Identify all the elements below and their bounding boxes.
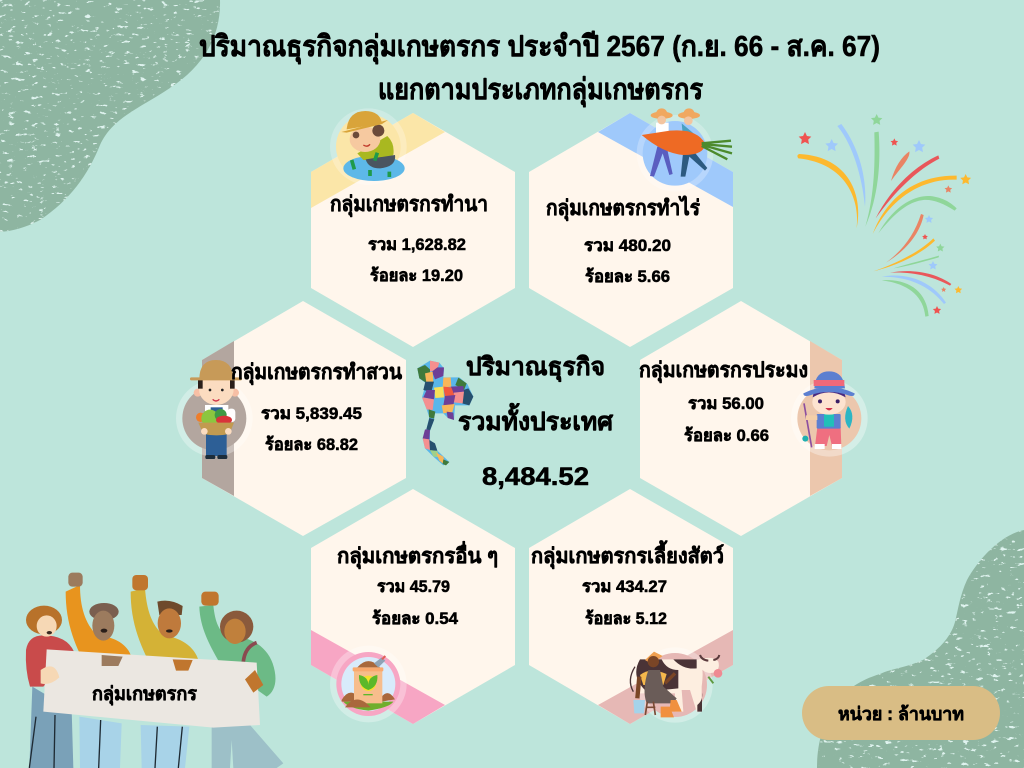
heading: กลุ่มเกษตรกรเลี้ยงสัตว์ [531, 540, 724, 570]
band: peach side [810, 341, 842, 496]
icon: farmer milking cow [630, 647, 722, 723]
unit label [802, 686, 1000, 740]
band: rose corner [598, 630, 733, 724]
panel: field crop farmers [529, 108, 733, 347]
total: รวม 1,628.82 [368, 235, 466, 254]
total: รวม 434.27 [582, 577, 667, 596]
panel: fishery farmers [639, 301, 868, 536]
panel: rice farmers [311, 108, 515, 347]
title: แยกตามประเภทกลุ่มเกษตรกร [378, 74, 703, 107]
heading line 2: รวมทั้งประเทศ [458, 402, 614, 436]
percent: ร้อยละ 68.82 [265, 435, 358, 454]
banner [43, 649, 260, 728]
person: woman in red [26, 606, 74, 768]
percent: ร้อยละ 0.54 [372, 609, 459, 628]
percent: ร้อยละ 19.20 [370, 266, 463, 285]
heading: กลุ่มเกษตรกรประมง [639, 359, 808, 384]
center total [458, 353, 614, 491]
icon: orchard farmer [176, 360, 253, 459]
icon: fisher boy [791, 371, 868, 457]
icon: rice farmer [330, 108, 407, 185]
band: yellow corner [311, 113, 445, 208]
panel: orchard farmers [176, 301, 406, 536]
panel: other farmers [311, 489, 515, 724]
band: brown side [202, 341, 234, 496]
unit label: หน่วย : ล้านบาท [838, 704, 964, 724]
band: blue corner [598, 113, 733, 207]
person: woman in green [199, 592, 283, 768]
illustration: farmers holding banner [26, 573, 283, 768]
grand total: 8,484.52 [482, 463, 589, 491]
heading: กลุ่มเกษตรกรทำนา [330, 193, 488, 218]
title [199, 31, 880, 107]
heading: กลุ่มเกษตรกรทำสวน [231, 361, 403, 386]
total: รวม 5,839.45 [261, 404, 362, 423]
icon: farmers carrying carrot [637, 108, 732, 192]
person: man in yellow [131, 575, 199, 768]
heading: กลุ่มเกษตรกรทำไร่ [546, 195, 701, 222]
heading: กลุ่มเกษตรกรอื่น ๆ [337, 540, 498, 570]
banner text: กลุ่มเกษตรกร [92, 684, 198, 706]
decorative blob: bottom right [817, 530, 1024, 768]
panel: livestock farmers [529, 489, 733, 724]
percent: ร้อยละ 5.12 [585, 609, 667, 628]
heading line 1: ปริมาณธุรกิจ [466, 353, 605, 383]
decorative blob: top left [0, 0, 220, 232]
percent: ร้อยละ 5.66 [585, 267, 670, 286]
band: pink corner [311, 630, 445, 724]
icon: fireworks [797, 114, 971, 317]
percent: ร้อยละ 0.66 [684, 426, 769, 445]
total: รวม 56.00 [688, 394, 764, 413]
total: รวม 45.79 [377, 577, 450, 596]
map: Thailand provinces [417, 361, 473, 465]
icon: fertiliser bag [330, 646, 407, 722]
total: รวม 480.20 [584, 236, 671, 255]
title: ปริมาณธุรกิจกลุ่มเกษตรกร ประจำปี 2567 (ก.ย. 66 - ส.ค. 67) [199, 31, 880, 64]
person: man in orange [66, 573, 132, 768]
